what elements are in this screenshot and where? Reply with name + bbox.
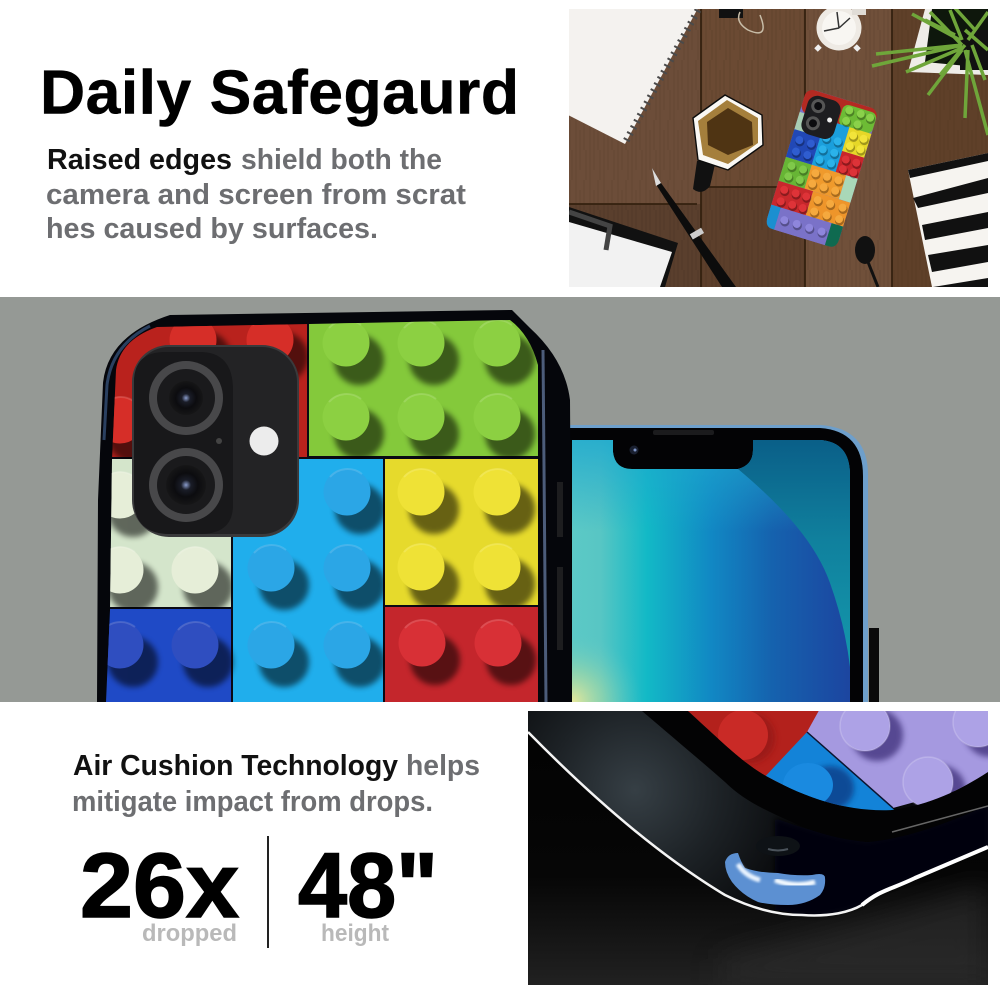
lower red brick (385, 607, 541, 702)
plant (872, 8, 988, 135)
spoon (855, 236, 878, 287)
photo: desk flat lay with phone case (568, 6, 988, 287)
air cushion bubble (725, 836, 825, 905)
stat: 26x dropped: dropped (142, 920, 237, 947)
case bumper (528, 711, 786, 896)
photo: air cushion corner close-up (528, 697, 1000, 985)
description: raised edges: Raised edges (47, 144, 232, 176)
description: raised edges (46, 144, 466, 245)
pen (652, 168, 736, 287)
white edge highlight (528, 732, 988, 915)
stat: 48 inch height: 48" (298, 835, 438, 937)
air cushion description: Air Cushion Technology (73, 750, 398, 782)
camera module (132, 345, 299, 537)
frame (550, 425, 868, 710)
flash (250, 426, 278, 456)
grey band (0, 297, 1000, 702)
brick pattern (96, 315, 545, 705)
pale green brick (110, 459, 231, 609)
description: raised edges: camera and screen from scrat (46, 179, 466, 211)
light blue brick (233, 459, 385, 702)
right phone front view (550, 425, 879, 710)
dark blue brick (96, 609, 233, 702)
case body (97, 310, 572, 702)
yellow brick (385, 459, 541, 609)
description: raised edges: hes caused by surfaces. (46, 213, 378, 245)
notch camera (630, 430, 714, 454)
upper lens (149, 361, 223, 435)
clipboard (569, 207, 678, 287)
lower lens (149, 448, 223, 522)
side button (869, 628, 879, 702)
red brick (112, 324, 307, 459)
clip and clock (719, 6, 866, 50)
coffee cup (693, 95, 763, 192)
air cushion description: mitigate impact from drops. (72, 786, 433, 818)
screen (572, 440, 850, 702)
lego bricks (688, 711, 988, 810)
striped notebook (908, 153, 988, 287)
stat: 48 inch height: height (321, 920, 389, 947)
green brick (309, 318, 541, 459)
notebook (568, 8, 698, 144)
title: Daily Safegaurd (40, 58, 519, 128)
description: raised edges: shield both the (241, 144, 442, 176)
air cushion description (72, 750, 480, 818)
small lego phone case (765, 88, 879, 249)
air cushion description: helps (406, 750, 480, 782)
main phone case back view (96, 310, 572, 705)
stat: 26x dropped: 26x (80, 835, 239, 937)
